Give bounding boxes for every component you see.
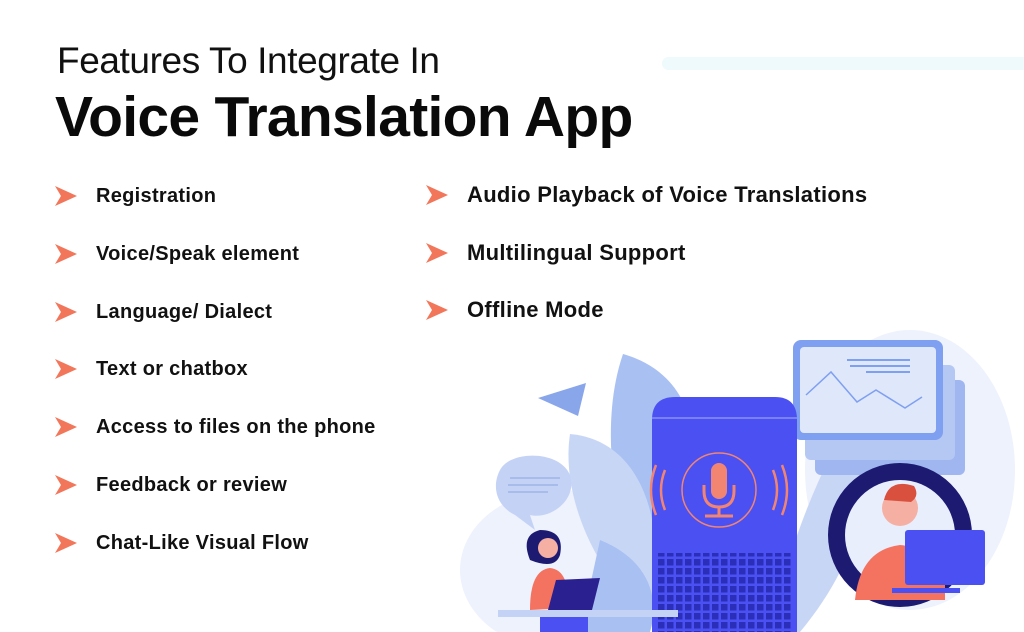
leaves [611, 354, 692, 600]
item: Feedback: Feedback or review [96, 474, 287, 496]
woman [527, 530, 561, 564]
decorative cyan bar [662, 57, 1024, 70]
item: Access to files: Access to files on the phone [96, 416, 376, 438]
item: Chat-Like Visual Flow: Chat-Like Visual Flow [96, 532, 309, 554]
item: Registration: Registration [96, 185, 216, 207]
monitor charts [815, 380, 965, 475]
list: left column [55, 185, 376, 554]
item: Language/ Dialect: Language/ Dialect [96, 301, 272, 323]
title line 2: Voice Translation App [55, 85, 633, 149]
speaker [652, 397, 797, 632]
gear and man [828, 463, 972, 607]
item: Text or chatbox: Text or chatbox [96, 358, 248, 380]
item: Voice/Speak element: Voice/Speak element [96, 243, 299, 265]
speaker grille [658, 553, 792, 632]
speech bubble [496, 456, 571, 530]
background blobs [460, 490, 660, 632]
item: Multilingual Support: Multilingual Support [467, 240, 686, 265]
title line 1: Features To Integrate In [57, 40, 440, 81]
mic icon [682, 453, 756, 527]
item: Audio Playback: Audio Playback of Voice Translations [467, 182, 867, 207]
item: Offline Mode: Offline Mode [467, 297, 604, 322]
paper plane [538, 383, 586, 416]
list: right column [426, 182, 867, 322]
